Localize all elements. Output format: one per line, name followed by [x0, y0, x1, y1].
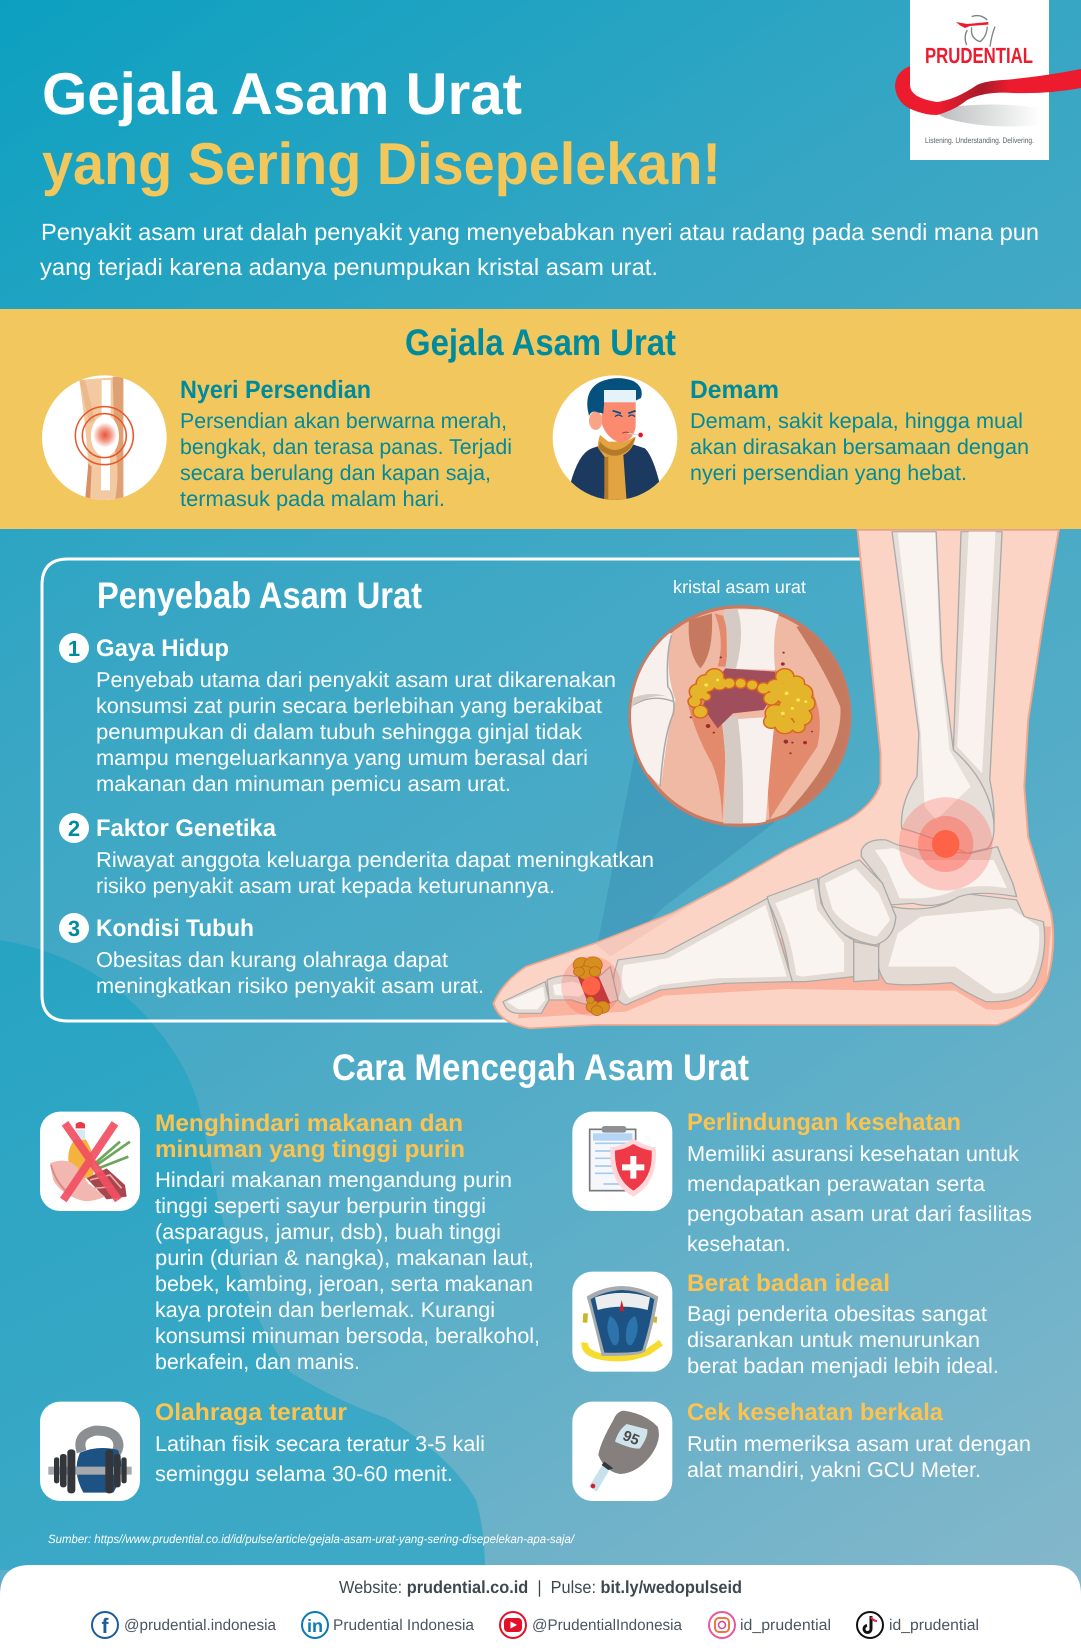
item 1: gaya hidup: makanan dan minuman pemicu asam urat. — [96, 772, 511, 796]
social: youtube — [500, 1612, 682, 1638]
text: nyeri persendian: secara berulang dan kapan saja, — [180, 461, 491, 485]
bones: foot — [503, 840, 1045, 1013]
social: facebook: @prudential.indonesia — [124, 1617, 276, 1634]
text: nyeri persendian — [180, 376, 512, 511]
social: instagram — [709, 1612, 831, 1638]
text: Rutin memeriksa asam urat dengan — [687, 1432, 1031, 1456]
text: nyeri persendian: termasuk pada malam hari. — [180, 487, 445, 511]
text: nyeri persendian: Persendian akan berwarna merah, — [180, 409, 507, 433]
social: linkedin — [302, 1612, 474, 1638]
item 2: faktor genetika: 2 — [68, 816, 80, 841]
logo: Prudential: PRUDENTIAL — [925, 43, 1033, 68]
item 2: faktor genetika: Faktor Genetika — [96, 815, 277, 842]
text: nyeri persendian: bengkak, dan terasa panas. Terjadi — [180, 435, 512, 459]
text: bebek, kambing, jeroan, serta makanan — [155, 1272, 533, 1296]
logo: Prudential — [895, 0, 1081, 160]
inflammation: toe with crystals — [561, 956, 621, 1016]
tip: berat badan ideal — [572, 1270, 999, 1378]
title — [42, 61, 721, 197]
item 3: kondisi tubuh: Obesitas dan kurang olahraga dapat — [96, 948, 448, 972]
icon: crossed food — [40, 1112, 140, 1211]
text: kaya protein dan berlemak. Kurangi — [155, 1298, 495, 1322]
item 1: gaya hidup: mampu mengeluarkannya yang umum berasal dari — [96, 746, 588, 770]
bone highlights — [507, 848, 1039, 1009]
social: instagram: id_prudential — [740, 1617, 831, 1634]
title: yang Sering Disepelekan! — [42, 131, 721, 197]
text — [687, 1399, 1031, 1482]
text: pengobatan asam urat dari fasilitas — [687, 1202, 1032, 1226]
icon: glucose meter: 95 — [621, 1427, 642, 1448]
icon: man with fever — [553, 375, 677, 503]
item 1: gaya hidup: Penyebab utama dari penyakit asam urat dikarenakan — [96, 668, 616, 692]
text: Memiliki asuransi kesehatan untuk — [687, 1142, 1019, 1166]
text — [155, 1110, 540, 1374]
footer — [0, 1565, 1081, 1650]
text: Latihan fisik secara teratur 3-5 kali — [155, 1432, 485, 1456]
panel: gejala asam urat — [0, 309, 1081, 529]
text: Menghindari makanan dan — [155, 1110, 463, 1137]
text — [155, 1399, 485, 1486]
text: berkafein, dan manis. — [155, 1350, 360, 1374]
item 3: kondisi tubuh: meningkatkan risiko penyakit asam urat. — [96, 974, 484, 998]
tip: cek kesehatan berkala — [572, 1399, 1031, 1501]
item 1: gaya hidup: penumpukan di dalam tubuh sehingga ginjal tidak — [96, 720, 582, 744]
text: demam — [690, 376, 1029, 485]
tip: perlindungan kesehatan — [572, 1109, 1032, 1256]
social: youtube: @PrudentialIndonesia — [532, 1617, 682, 1634]
text: tinggi seperti sayur berpurin tinggi — [155, 1194, 486, 1218]
text: demam: Demam — [690, 376, 779, 404]
text: Berat badan ideal — [687, 1270, 890, 1297]
text: demam: akan dirasakan bersamaan dengan — [690, 435, 1029, 459]
illustration: foot skeleton with gout — [493, 530, 1059, 1028]
item 1: gaya hidup: 1 — [68, 636, 80, 661]
text: alat mandiri, yakni GCU Meter. — [687, 1458, 981, 1482]
panel: penyebab asam urat — [42, 559, 865, 1021]
uric acid crystals — [689, 669, 814, 733]
item 2: faktor genetika: risiko penyakit asam urat kepada keturunannya. — [96, 874, 555, 898]
heading: penyebab: Penyebab Asam Urat — [97, 575, 422, 616]
foot skin — [493, 530, 1059, 1028]
icon: clipboard and shield — [572, 1112, 672, 1211]
social: tiktok: id_prudential — [889, 1617, 979, 1634]
social: linkedin: in — [307, 1616, 323, 1636]
text: seminggu selama 30-60 menit. — [155, 1462, 453, 1486]
text: purin (durian & nangka), makanan laut, — [155, 1246, 534, 1270]
tip: olahraga teratur — [40, 1399, 485, 1501]
text: konsumsi minuman bersoda, beralkohol, — [155, 1324, 540, 1348]
icon: bathroom scale — [572, 1272, 672, 1372]
item 3: kondisi tubuh: Kondisi Tubuh — [96, 915, 254, 942]
item 1: gaya hidup: konsumsi zat purin secara berlebihan yang berakibat — [96, 694, 602, 718]
text: minuman yang tinggi purin — [155, 1136, 465, 1163]
social: facebook — [92, 1612, 276, 1638]
text: mendapatkan perawatan serta — [687, 1172, 985, 1196]
heading: cara mencegah: Cara Mencegah Asam Urat — [332, 1047, 749, 1088]
social: linkedin: Prudential Indonesia — [333, 1617, 474, 1634]
text: Olahraga teratur — [155, 1399, 347, 1426]
item 2: faktor genetika: Riwayat anggota keluarga penderita dapat meningkatkan — [96, 848, 654, 872]
item 2: faktor genetika — [59, 813, 654, 898]
icon: knee joint — [42, 375, 167, 502]
text: Cek kesehatan berkala — [687, 1399, 944, 1426]
intro text: yang terjadi karena adanya penumpukan kristal asam urat. — [40, 254, 658, 280]
item 3: kondisi tubuh — [59, 913, 484, 998]
heading: gejala: Gejala Asam Urat — [405, 322, 676, 363]
text: berat badan menjadi lebih ideal. — [687, 1354, 999, 1378]
text: nyeri persendian: Nyeri Persendian — [180, 376, 371, 404]
text: (asparagus, jamur, dsb), buah tinggi — [155, 1220, 501, 1244]
icon: dumbbell and kettlebell — [40, 1402, 140, 1501]
text: demam: nyeri persendian yang hebat. — [690, 461, 967, 485]
icon: glucose meter — [572, 1402, 672, 1501]
logo: Prudential: Listening. Understanding. Delivering. — [925, 136, 1034, 145]
text — [687, 1270, 999, 1378]
bones: tibia and fibula — [892, 532, 1002, 853]
magnifier beam — [597, 753, 775, 957]
website line: Website: prudential.co.id | Pulse: bit.ly/wedopulseid — [339, 1577, 742, 1597]
magnified joint circle — [630, 607, 850, 825]
text: Perlindungan kesehatan — [687, 1109, 961, 1136]
text: disarankan untuk menurunkan — [687, 1328, 980, 1352]
item 1: gaya hidup — [59, 633, 616, 796]
title: Gejala Asam Urat — [42, 61, 522, 127]
text — [687, 1109, 1032, 1256]
source note: Sumber: https//www.prudential.co.id/id/pulse/article/gejala-asam-urat-yang-sering-disepelekan-apa-saja/ — [48, 1532, 576, 1546]
intro text: Penyakit asam urat dalah penyakit yang menyebabkan nyeri atau radang pada sendi mana pun — [41, 219, 1039, 245]
text: demam: Demam, sakit kepala, hingga mual — [690, 409, 1023, 433]
text: kesehatan. — [687, 1232, 791, 1256]
intro text — [40, 219, 1039, 280]
text: Bagi penderita obesitas sangat — [687, 1302, 987, 1326]
tip: makanan tinggi purin — [40, 1110, 540, 1374]
inflammation: ankle — [899, 797, 992, 891]
item 3: kondisi tubuh: 3 — [68, 916, 80, 941]
social: facebook: f — [102, 1615, 110, 1638]
text: Hindari makanan mengandung purin — [155, 1168, 512, 1192]
item 1: gaya hidup: Gaya Hidup — [96, 635, 229, 662]
label: kristal asam urat: kristal asam urat — [673, 577, 806, 597]
social: tiktok — [857, 1612, 979, 1638]
